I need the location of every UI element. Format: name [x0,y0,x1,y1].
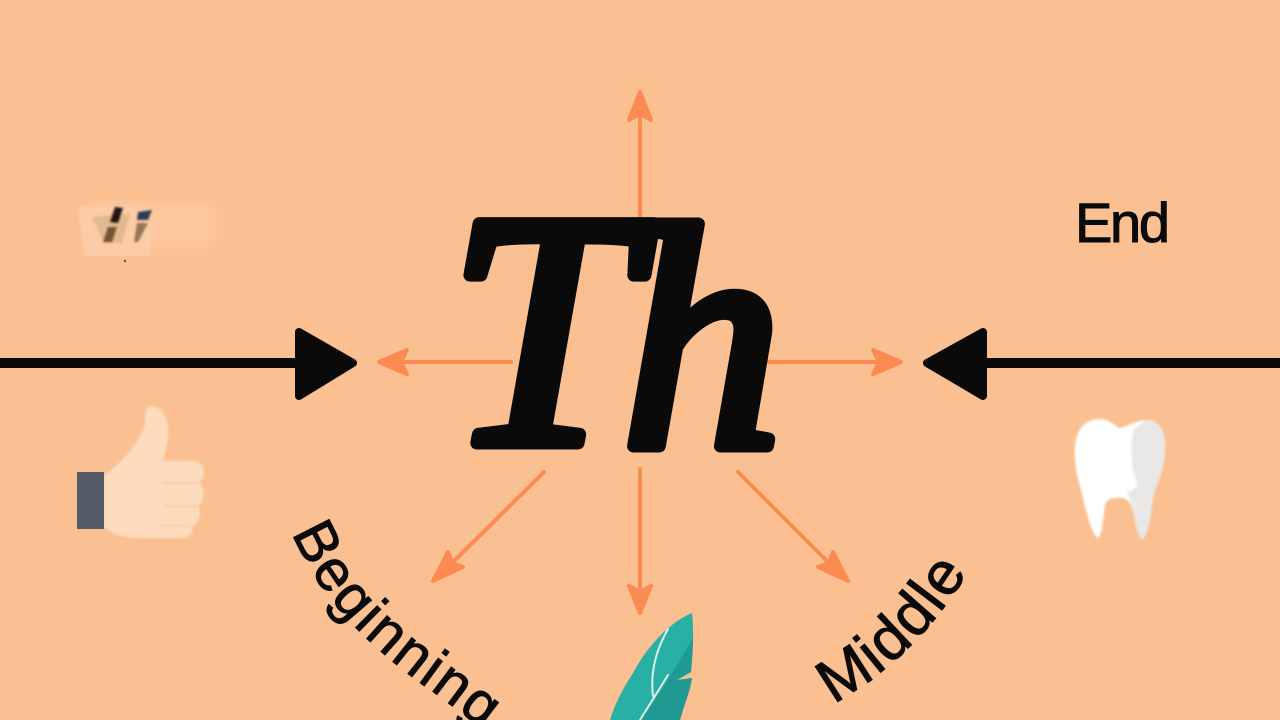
label: End: End [1075,191,1170,254]
arrow: black from left [0,332,353,396]
icon: feather [610,613,693,720]
arrow: black from right [927,332,1280,396]
icon: thumbs up [77,406,204,538]
label: Middle: Middle [814,562,963,702]
arrow: orange up [629,92,651,234]
icon: tooth [1075,419,1165,540]
icon: blurred box with marks [78,204,215,262]
title: Th: h [622,162,782,516]
arrow: orange down [629,469,651,613]
arrow: orange diagonal lower right [738,472,848,581]
arrow: orange left [379,350,511,374]
arrow: orange right [769,350,901,374]
title: Th [448,145,782,516]
arrow: orange diagonal lower left [433,472,544,581]
title: Th: T [448,145,657,516]
